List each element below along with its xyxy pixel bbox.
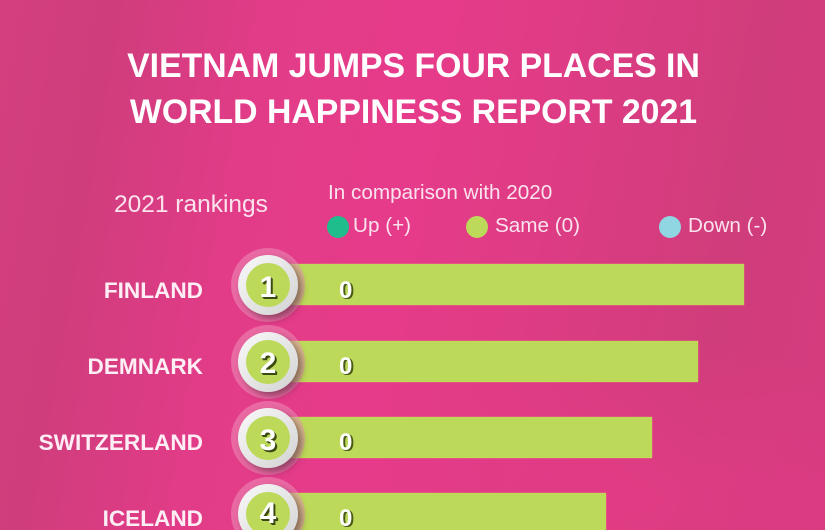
title: WORLD HAPPINESS REPORT 2021 (130, 93, 697, 131)
row: Iceland (103, 477, 607, 530)
row: Finland: 1 (260, 271, 276, 304)
row: Iceland: 4 (260, 497, 276, 530)
legend item: up (327, 214, 411, 238)
legend item: down: Down (-) (688, 214, 767, 237)
row: Switzerland: 3 (260, 424, 276, 457)
legend item: same: Same (0) (495, 214, 580, 237)
row: Finland: FINLAND (104, 278, 203, 303)
row: Denmark: DEMNARK (88, 354, 203, 379)
legend (327, 181, 767, 238)
title (127, 47, 700, 131)
row: Finland (104, 248, 745, 324)
row: Denmark: 2 (260, 347, 276, 380)
row: Denmark (88, 325, 699, 400)
legend heading: In comparison with 2020 (328, 181, 552, 204)
legend item: up: Up (+) (353, 214, 411, 237)
rankings label: 2021 rankings (114, 191, 268, 218)
row: Switzerland: 0 (339, 429, 352, 456)
row: Switzerland: SWITZERLAND (39, 430, 203, 455)
row: Denmark: 0 (339, 353, 352, 380)
row: Switzerland (39, 401, 653, 476)
row: Finland: 0 (339, 277, 352, 304)
title: VIETNAM JUMPS FOUR PLACES IN (127, 47, 700, 85)
